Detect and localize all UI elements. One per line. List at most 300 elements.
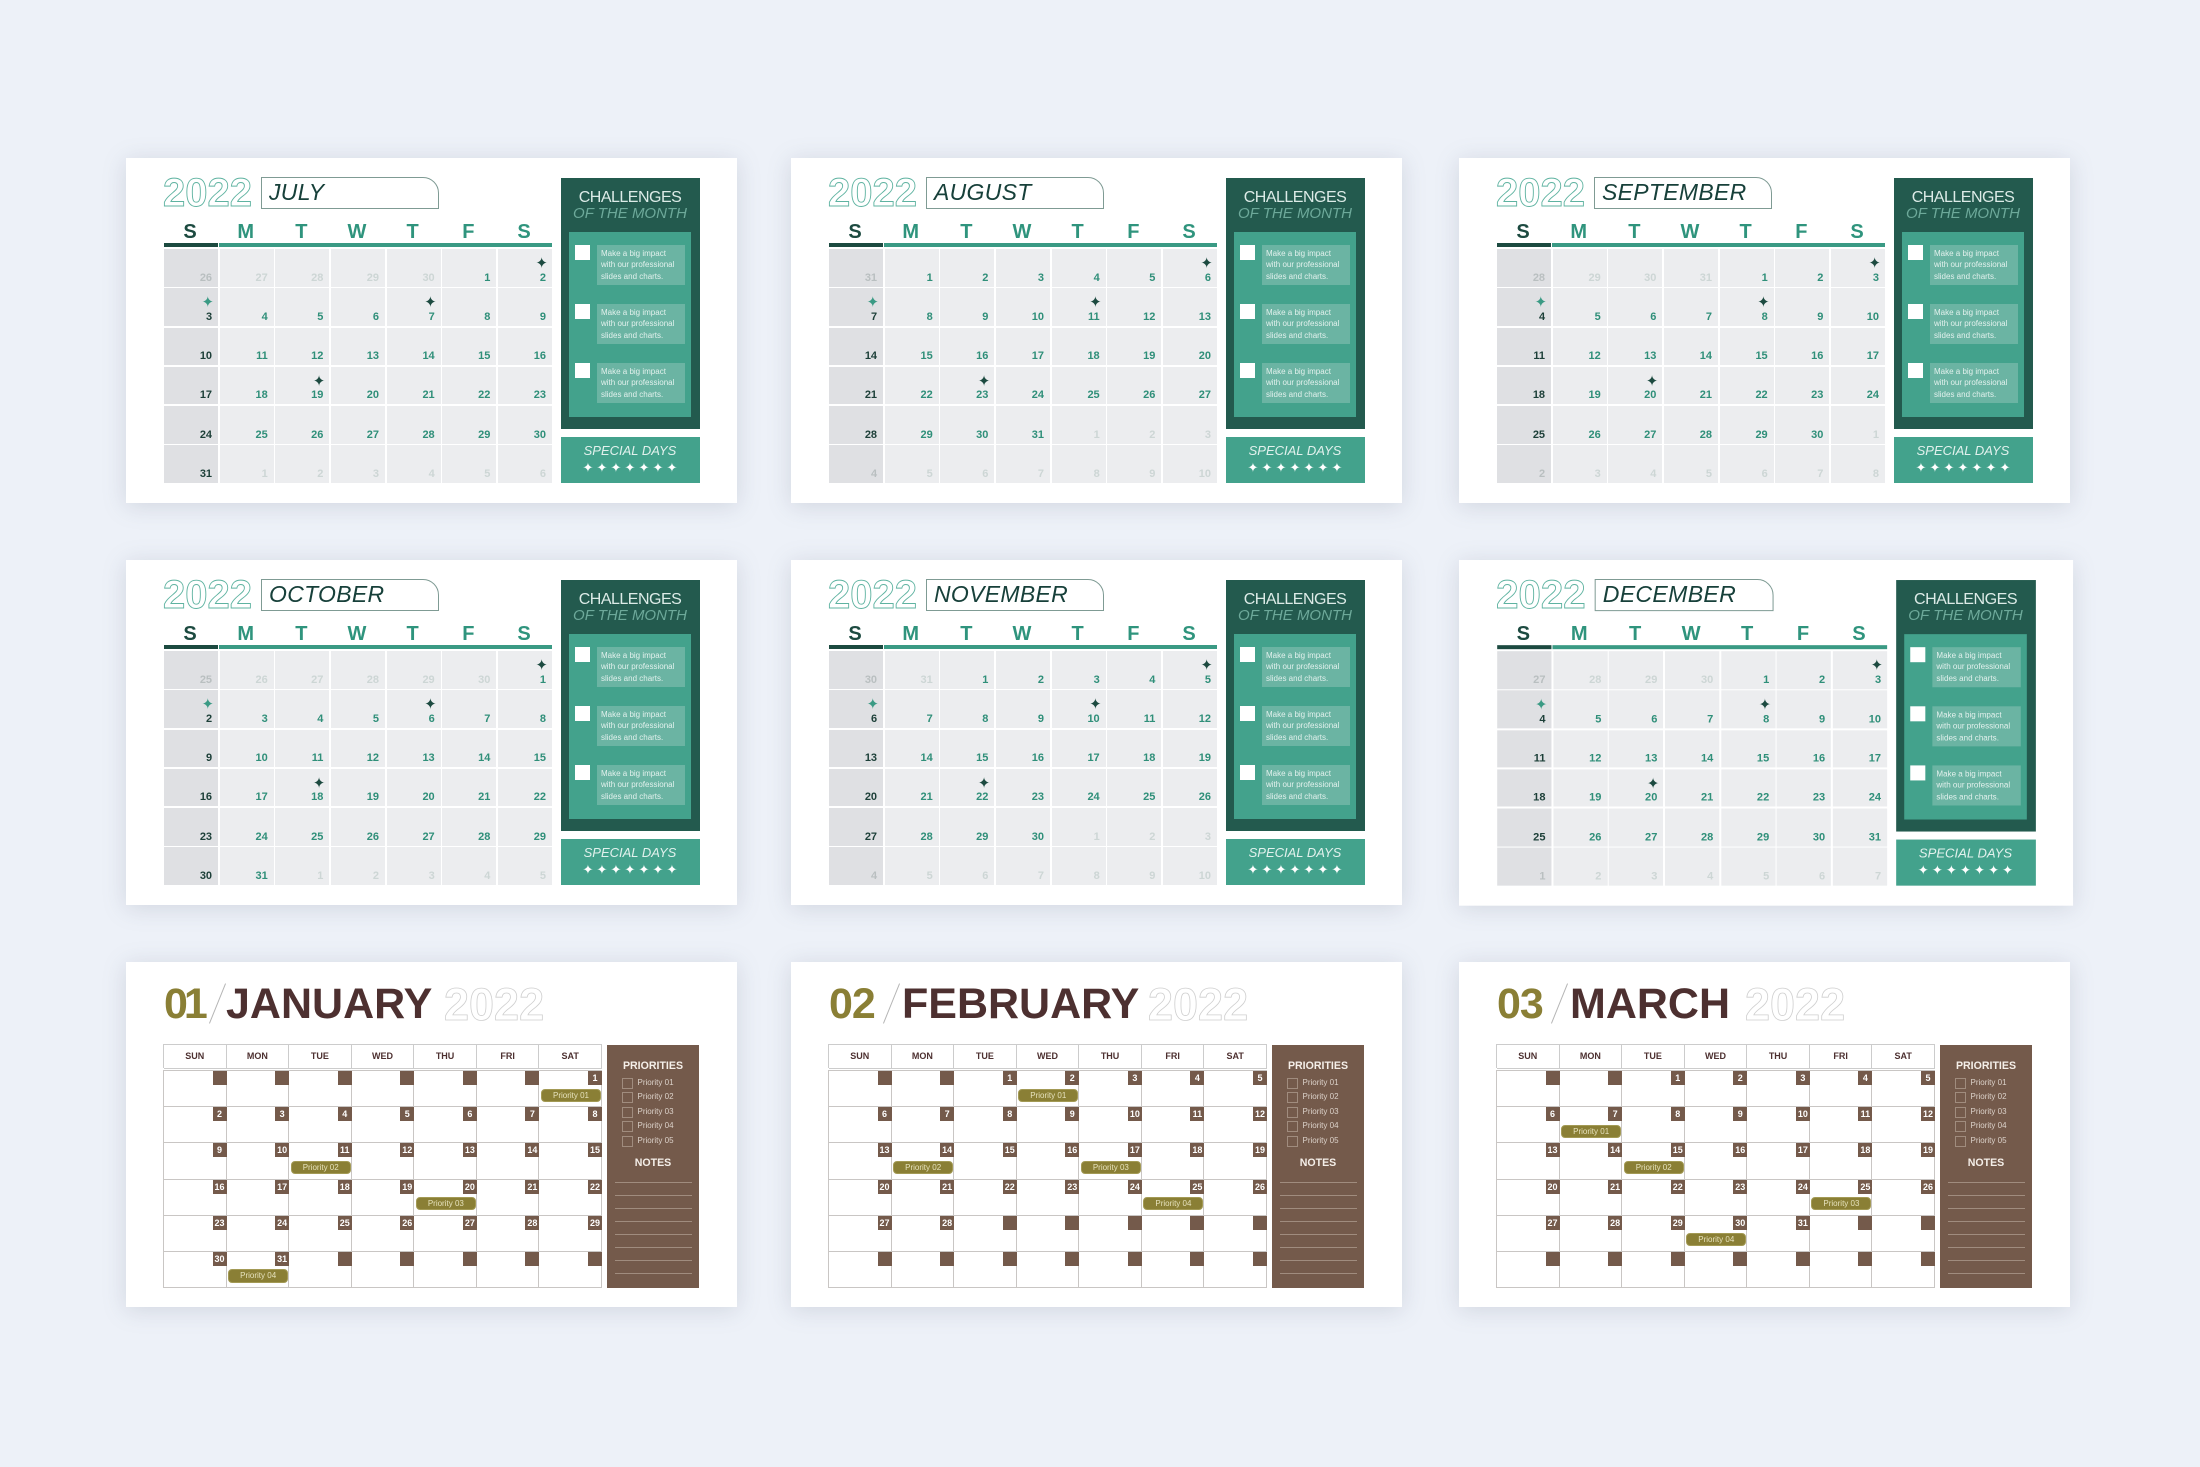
date grid: 18 (1860, 1145, 1870, 1155)
panel: priorities and notes (1940, 1045, 2032, 1288)
challenge list: Make a big impact (1266, 367, 1331, 376)
date grid: 2 (540, 272, 546, 284)
date grid: 11 (340, 1145, 349, 1155)
priority pill (291, 1161, 351, 1174)
challenge list: slides and charts. (1266, 674, 1328, 683)
challenge list: with our professional (1934, 378, 2007, 387)
weekday header: T (1741, 623, 1753, 645)
date grid: 27 (1548, 1218, 1558, 1228)
date grid: 4 (1707, 871, 1713, 883)
date grid: 10 (1130, 1109, 1140, 1119)
weekday header: THU (436, 1051, 454, 1061)
date grid: 7 (530, 1109, 535, 1119)
challenge list: slides and charts. (1266, 390, 1328, 399)
challenge list (1234, 634, 1356, 819)
panel: priorities and notes: Priority 01 (1302, 1078, 1339, 1086)
weekday header (1496, 1044, 1935, 1068)
weekday header: WED (1037, 1051, 1058, 1061)
date grid: 1 (1763, 674, 1769, 686)
weekday header (1497, 221, 1885, 247)
date grid: 25 (255, 429, 268, 441)
date grid: 24 (1798, 1182, 1808, 1192)
date grid: 29 (534, 831, 546, 843)
date grid: 27 (1645, 831, 1657, 843)
weekday header: W (1013, 623, 1031, 645)
month name: AUGUST (934, 179, 1032, 205)
panel: special days: ✦✦✦✦✦✦✦ (1916, 461, 2013, 476)
challenge list: with our professional (601, 378, 674, 387)
weekday header: M (902, 221, 919, 243)
date grid: 6 (467, 1109, 472, 1119)
date grid: 25 (200, 674, 212, 686)
date grid: 15 (920, 350, 933, 362)
date grid (1496, 1070, 1935, 1288)
challenge list: slides and charts. (1266, 272, 1328, 281)
date grid: 27 (422, 831, 435, 843)
priority pill: Priority 04 (1698, 1235, 1734, 1244)
weekday header: S (517, 623, 531, 645)
challenge list: with our professional (1266, 721, 1339, 730)
date grid: 24 (255, 831, 268, 843)
panel: priorities and notes: Priority 03 (1970, 1107, 2007, 1116)
date grid: 13 (1645, 753, 1657, 765)
date grid: 4 (1650, 468, 1656, 480)
date grid: 3 (1038, 272, 1044, 284)
weekday header: MON (247, 1051, 268, 1061)
date grid: 3 (1132, 1073, 1137, 1083)
date grid: 23 (534, 389, 546, 401)
weekday header: S (1516, 221, 1530, 243)
challenge list: Make a big impact (1266, 308, 1331, 317)
weekday header: F (462, 221, 474, 243)
challenge list: with our professional (1936, 781, 2010, 790)
date grid: 7 (927, 713, 933, 725)
date grid: 2 (217, 1109, 222, 1119)
panel: special days (1896, 840, 2035, 886)
month name: DECEMBER (1603, 581, 1736, 607)
weekday header: S (1182, 623, 1196, 645)
date grid: 16 (976, 350, 988, 362)
date grid: 28 (942, 1218, 952, 1228)
weekday header: W (1682, 623, 1701, 645)
date grid: 19 (1588, 389, 1601, 401)
date grid: 24 (1130, 1182, 1140, 1192)
date grid: 5 (927, 468, 933, 480)
priority pill: Priority 03 (1823, 1199, 1859, 1208)
date grid: 5 (373, 713, 379, 725)
panel: challenges of the month (1226, 178, 1364, 429)
weekday header (163, 1044, 602, 1068)
date grid: 5 (317, 311, 323, 323)
date grid: 7 (1038, 468, 1044, 480)
date grid: 8 (540, 713, 546, 725)
challenge list: with our professional (1266, 319, 1339, 328)
date grid: 7 (1817, 468, 1823, 480)
priority pill (541, 1088, 601, 1102)
date grid: 9 (540, 311, 546, 323)
priority pill: Priority 02 (905, 1163, 941, 1172)
date grid: 25 (1533, 429, 1545, 441)
date grid: 25 (311, 831, 323, 843)
date grid: 28 (527, 1218, 537, 1228)
date grid: 5 (1595, 311, 1601, 323)
weekday header: FRI (1833, 1051, 1848, 1061)
challenge list: Make a big impact (1266, 651, 1331, 660)
date grid: 21 (1700, 389, 1712, 401)
date grid: 3 (1800, 1073, 1805, 1083)
date grid: 27 (880, 1218, 890, 1228)
date grid: 20 (422, 791, 435, 803)
panel: priorities and notes (1272, 1045, 1364, 1288)
date grid: 31 (277, 1254, 287, 1264)
date grid: 15 (478, 350, 490, 362)
panel: challenges of the month: CHALLENGES (579, 188, 681, 206)
weekday header: S (1850, 221, 1864, 243)
date grid: 5 (1595, 713, 1601, 725)
date grid: 16 (1813, 753, 1825, 765)
date grid: 18 (1143, 752, 1155, 764)
date grid: 6 (1650, 311, 1656, 323)
date grid: 8 (927, 311, 933, 323)
date grid: 12 (311, 350, 323, 362)
date grid: 8 (1873, 468, 1879, 480)
date grid: 23 (976, 389, 988, 401)
date grid: 7 (1613, 1109, 1618, 1119)
date grid: 25 (1533, 831, 1545, 843)
date grid: 27 (465, 1218, 475, 1228)
date grid: 18 (1192, 1145, 1202, 1155)
weekday header: M (902, 623, 919, 645)
weekday header: TUE (311, 1051, 329, 1061)
date grid: 26 (1143, 389, 1155, 401)
date grid: 19 (1199, 752, 1211, 764)
panel: special days (1226, 437, 1364, 483)
date grid: 29 (1645, 674, 1657, 686)
date grid: 18 (1087, 350, 1100, 362)
date grid: 6 (1550, 1109, 1555, 1119)
date grid: 15 (590, 1145, 600, 1155)
date grid: 26 (1588, 429, 1601, 441)
date grid: 14 (1701, 753, 1713, 765)
date grid: 28 (1533, 272, 1545, 284)
date grid: 23 (1067, 1182, 1077, 1192)
weekday header: SUN (185, 1051, 204, 1061)
date grid: 5 (1149, 272, 1155, 284)
date grid: 3 (1094, 674, 1100, 686)
date grid: 26 (367, 831, 379, 843)
panel: priorities and notes: PRIORITIES (1288, 1060, 1348, 1072)
date grid: 29 (590, 1218, 600, 1228)
date grid: 14 (1610, 1145, 1620, 1155)
panel: special days (1894, 437, 2032, 483)
challenge list (569, 634, 691, 819)
date grid: 2 (1038, 674, 1044, 686)
date grid: 1 (927, 272, 933, 284)
date grid: 27 (1533, 674, 1545, 686)
date grid: 30 (865, 674, 877, 686)
icon: star: ✦ (201, 293, 214, 311)
date grid: 3 (429, 870, 435, 882)
date grid: 31 (865, 272, 877, 284)
date grid: 24 (277, 1218, 287, 1228)
date grid: 8 (484, 311, 490, 323)
date grid: 4 (871, 870, 877, 882)
weekday header: W (1013, 221, 1031, 243)
date grid: 20 (1199, 350, 1211, 362)
panel: priorities and notes: Priority 02 (1970, 1092, 2007, 1101)
weekday header: M (237, 221, 254, 243)
date grid: 19 (311, 389, 323, 401)
date grid: 6 (1819, 871, 1825, 883)
date grid: 15 (976, 752, 988, 764)
panel: July calendar (126, 158, 737, 503)
date grid: 4 (1195, 1073, 1200, 1083)
date grid (163, 1070, 602, 1288)
priority pill: Priority 01 (1573, 1127, 1609, 1136)
date grid: 5 (484, 468, 490, 480)
date grid: 4 (317, 713, 323, 725)
date grid: 19 (1255, 1145, 1265, 1155)
date grid: 15 (1005, 1145, 1015, 1155)
date grid: 22 (1673, 1182, 1683, 1192)
panel: October calendar (126, 560, 737, 905)
date grid: 16 (200, 791, 212, 803)
panel: November calendar (791, 560, 1402, 905)
date grid: 25 (1860, 1182, 1870, 1192)
icon: star: ✦ (424, 293, 437, 311)
date grid: 3 (280, 1109, 285, 1119)
date grid: 26 (1923, 1182, 1933, 1192)
weekday header: S (183, 623, 197, 645)
date grid: 22 (478, 389, 490, 401)
icon: star: ✦ (1200, 254, 1213, 272)
date grid: 5 (1205, 674, 1211, 686)
challenge list: with our professional (1934, 260, 2007, 269)
month name (1595, 579, 1774, 611)
challenge list: Make a big impact (1934, 308, 1999, 317)
date grid: 2 (1817, 272, 1823, 284)
date grid: 29 (1755, 429, 1768, 441)
date grid: 21 (478, 791, 490, 803)
date grid: 6 (982, 468, 988, 480)
date grid: 12 (1588, 350, 1601, 362)
date grid: 9 (1819, 713, 1825, 725)
panel: special days: ✦✦✦✦✦✦✦ (583, 461, 680, 476)
date grid: 11 (1533, 350, 1545, 362)
date grid: 31 (255, 870, 268, 882)
date grid: 4 (1539, 713, 1545, 725)
month name: NOVEMBER (934, 581, 1068, 607)
date grid: 1 (262, 468, 268, 480)
date grid: 19 (1143, 350, 1155, 362)
challenge list: slides and charts. (1936, 674, 1999, 683)
panel: challenges of the month: CHALLENGES (1914, 591, 2017, 608)
panel: September calendar (1459, 158, 2070, 503)
date grid: 12 (1143, 311, 1155, 323)
date grid: 28 (865, 429, 877, 441)
weekday header: F (462, 623, 474, 645)
date grid: 17 (1130, 1145, 1140, 1155)
panel: priorities and notes: Priority 02 (638, 1092, 674, 1101)
date grid: 28 (920, 831, 933, 843)
date grid: 30 (534, 429, 546, 441)
date grid: 21 (527, 1182, 537, 1192)
date grid: 5 (1925, 1073, 1930, 1083)
date grid: 20 (367, 389, 379, 401)
challenge list: with our professional (1266, 378, 1339, 387)
date grid: 26 (200, 272, 212, 284)
month name (1594, 177, 1772, 209)
date grid (829, 651, 1217, 885)
weekday header (828, 1044, 1267, 1068)
date grid: 18 (311, 791, 323, 803)
icon: star: ✦ (1534, 293, 1547, 311)
date grid: 29 (1588, 272, 1601, 284)
date grid: 22 (976, 791, 988, 803)
date grid: 14 (478, 752, 490, 764)
date grid: 30 (1644, 272, 1656, 284)
weekday header: S (183, 221, 197, 243)
date grid: 24 (1867, 389, 1879, 401)
date grid: 15 (1757, 753, 1769, 765)
date grid: 30 (1032, 831, 1044, 843)
date grid: 4 (1863, 1073, 1868, 1083)
date grid: 7 (484, 713, 490, 725)
challenge list: Make a big impact (601, 367, 666, 376)
date grid: 23 (1813, 792, 1825, 804)
weekday header: SUN (1518, 1051, 1537, 1061)
date grid (829, 249, 1217, 483)
challenge list: slides and charts. (601, 792, 663, 801)
icon: star: ✦ (1089, 293, 1102, 311)
priority pill: Priority 04 (1155, 1199, 1191, 1208)
date grid: 13 (465, 1145, 475, 1155)
date grid: 9 (217, 1145, 222, 1155)
date grid: 28 (311, 272, 323, 284)
weekday header (829, 623, 1217, 649)
date grid: 10 (277, 1145, 287, 1155)
date grid: 8 (1094, 468, 1100, 480)
date grid: 7 (945, 1109, 950, 1119)
weekday header: WED (372, 1051, 393, 1061)
challenge list: slides and charts. (1934, 272, 1996, 281)
weekday header: S (848, 221, 862, 243)
challenge list: with our professional (1266, 662, 1339, 671)
panel: challenges of the month (1226, 580, 1364, 831)
icon: star: ✦ (535, 254, 548, 272)
date grid: 11 (1861, 1109, 1870, 1119)
weekday header: T (295, 623, 307, 645)
weekday header: T (1072, 221, 1084, 243)
month name: SEPTEMBER (1602, 179, 1747, 205)
challenge list: Make a big impact (1266, 249, 1331, 258)
panel: challenges of the month (1894, 178, 2032, 429)
date grid: 4 (342, 1109, 347, 1119)
weekday header: F (1127, 221, 1139, 243)
challenge list (1902, 232, 2024, 417)
date grid: 1 (1094, 831, 1100, 843)
date grid: 29 (920, 429, 933, 441)
challenge list: slides and charts. (1266, 792, 1328, 801)
panel: special days (1226, 839, 1364, 885)
date grid: 3 (373, 468, 379, 480)
date grid: 3 (262, 713, 268, 725)
priority pill (1624, 1161, 1684, 1174)
date grid: 13 (422, 752, 435, 764)
weekday header: MON (1580, 1051, 1601, 1061)
date grid: 8 (1007, 1109, 1012, 1119)
panel: December calendar (1459, 560, 2073, 906)
date grid: 1 (1762, 272, 1768, 284)
panel: January calendar (126, 962, 737, 1307)
challenge list: slides and charts. (601, 674, 663, 683)
date grid: 17 (255, 791, 268, 803)
panel: challenges of the month: OF THE MONTH (573, 205, 687, 222)
date grid: 7 (871, 311, 877, 323)
challenge list: slides and charts. (601, 272, 663, 281)
priority pill: Priority 03 (428, 1199, 464, 1208)
panel: challenges of the month: OF THE MONTH (1906, 205, 2020, 222)
date grid: 18 (1533, 389, 1545, 401)
date grid: 8 (982, 713, 988, 725)
challenge list: with our professional (1266, 780, 1339, 789)
date grid: 14 (1700, 350, 1712, 362)
date grid: 3 (206, 311, 212, 323)
date grid: 5 (1257, 1073, 1262, 1083)
weekday header: SAT (562, 1051, 579, 1061)
priority pill (1143, 1197, 1203, 1210)
challenge list: slides and charts. (1936, 733, 1999, 742)
date grid: 21 (422, 389, 435, 401)
date grid: 31 (1032, 429, 1044, 441)
panel: challenges of the month: CHALLENGES (1244, 188, 1346, 206)
panel: March calendar (1459, 962, 2070, 1307)
weekday header: T (1740, 221, 1752, 243)
date grid: 28 (1701, 831, 1713, 843)
date grid: 8 (1762, 311, 1768, 323)
priority pill (1561, 1125, 1621, 1138)
priority pill (893, 1161, 953, 1174)
date grid: 18 (1533, 792, 1545, 804)
challenge list: with our professional (601, 780, 674, 789)
date grid: 2 (1070, 1073, 1075, 1083)
challenge list: Make a big impact (1936, 769, 2002, 778)
date grid: 28 (1700, 429, 1712, 441)
challenge list: Make a big impact (601, 308, 666, 317)
weekday header: T (295, 221, 307, 243)
panel: challenges of the month (1896, 580, 2035, 832)
weekday header: SAT (1227, 1051, 1244, 1061)
challenge list: with our professional (601, 721, 674, 730)
date grid: 13 (1199, 311, 1211, 323)
date grid: 26 (311, 429, 323, 441)
date grid: 2 (1819, 674, 1825, 686)
weekday header: F (1797, 623, 1809, 645)
weekday header (164, 623, 552, 649)
date grid: 14 (942, 1145, 952, 1155)
slash divider (1551, 983, 1568, 1023)
date grid: 14 (527, 1145, 537, 1155)
date grid: 10 (1199, 870, 1211, 882)
date grid: 25 (1192, 1182, 1202, 1192)
date grid: 28 (1610, 1218, 1620, 1228)
date grid: 5 (1763, 871, 1769, 883)
date grid: 30 (422, 272, 435, 284)
challenge list: slides and charts. (601, 331, 663, 340)
date grid: 30 (478, 674, 490, 686)
date grid: 6 (373, 311, 379, 323)
panel: special days: ✦✦✦✦✦✦✦ (1248, 863, 1345, 878)
